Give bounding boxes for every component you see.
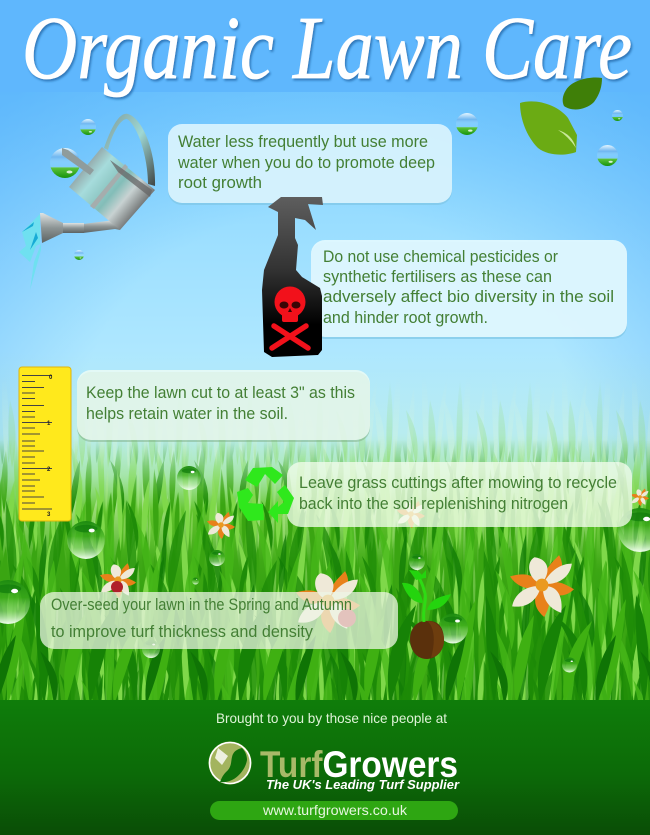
panel: mowing tip bbox=[77, 370, 370, 442]
icon: sprouting seed bbox=[402, 570, 451, 659]
panel: pesticides tip: synthetic fertilisers as these can bbox=[323, 268, 552, 286]
icon: water splash bbox=[19, 214, 41, 290]
icon: leaves bbox=[520, 78, 602, 155]
icon: recycle symbol bbox=[237, 467, 294, 523]
icon: watering can bbox=[40, 114, 155, 243]
icon: yellow ruler: 0 bbox=[49, 375, 53, 381]
panel: grass cuttings tip bbox=[287, 462, 632, 527]
panel: over-seed tip: to improve turf thickness and density bbox=[51, 623, 314, 641]
icon: spray bottle with skull bbox=[262, 197, 323, 357]
panel: pesticides tip: and hinder root growth. bbox=[323, 309, 488, 327]
grass field bbox=[0, 382, 650, 700]
panel: pesticides tip bbox=[311, 240, 627, 339]
icon: yellow ruler: 3 bbox=[47, 512, 51, 518]
footer intro text: Brought to you by those nice people at bbox=[216, 710, 447, 726]
icon: yellow ruler: 1 bbox=[47, 421, 51, 427]
panel: over-seed tip bbox=[40, 592, 398, 649]
panel: watering tip: Water less frequently but use more bbox=[178, 133, 428, 151]
panel: watering tip bbox=[168, 124, 452, 205]
icon: yellow ruler: 2 bbox=[47, 467, 51, 473]
panel: mowing tip: helps retain water in the soil. bbox=[86, 405, 288, 423]
website link pill: www.turfgrowers.co.uk bbox=[262, 802, 408, 818]
logo: TurfGrowers: TurfGrowers bbox=[260, 744, 458, 785]
panel: over-seed tip: Over-seed your lawn in the Spring and Autumn bbox=[51, 596, 352, 614]
sky background bbox=[0, 0, 650, 560]
title band bbox=[0, 0, 650, 92]
panel: pesticides tip: Do not use chemical pesticides or bbox=[323, 248, 559, 266]
panel: pesticides tip: adversely affect bio diversity in the soil bbox=[323, 288, 614, 306]
panel: grass cuttings tip: back into the soil replenishing nitrogen bbox=[299, 495, 568, 513]
logo emblem bbox=[208, 742, 252, 784]
icon: yellow ruler bbox=[19, 367, 71, 521]
panel: grass cuttings tip: Leave grass cuttings after mowing to recycle bbox=[299, 474, 617, 492]
water droplets in sky bbox=[50, 110, 623, 260]
panel: mowing tip: Keep the lawn cut to at least 3" as this bbox=[86, 384, 355, 402]
footer band bbox=[0, 700, 650, 835]
logo: TurfGrowers: The UK's Leading Turf Supplier bbox=[266, 778, 460, 792]
panel: watering tip: root growth bbox=[178, 174, 262, 192]
panel: watering tip: water when you do to promote deep bbox=[177, 154, 435, 172]
website link pill bbox=[210, 801, 458, 820]
logo: TurfGrowers bbox=[208, 742, 460, 792]
water droplets and flowers behind panels bbox=[0, 466, 650, 672]
